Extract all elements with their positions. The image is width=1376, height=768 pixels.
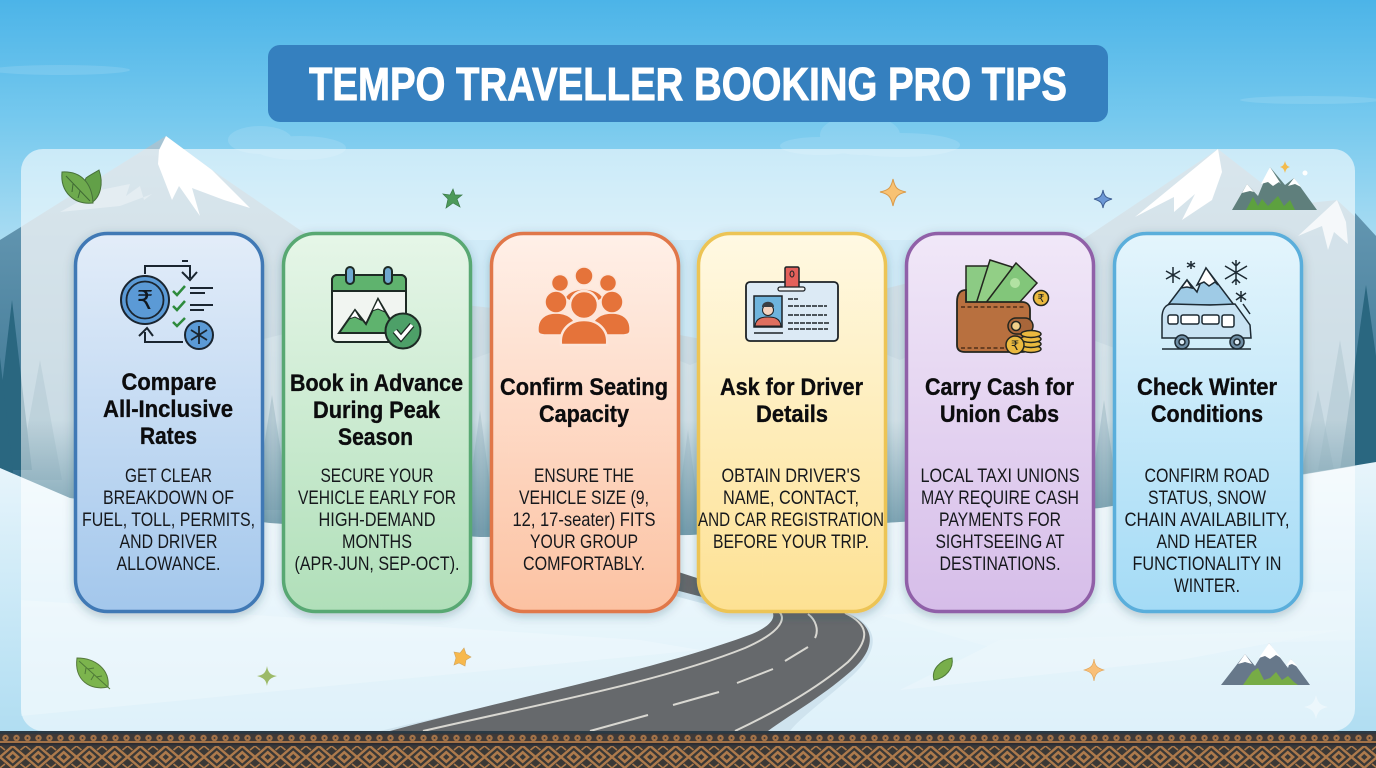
body text: CHAIN AVAILABILITY,: [1124, 510, 1290, 531]
heading: [290, 370, 463, 451]
icon: faint white sparkle: [1304, 695, 1328, 719]
icon: mini mountains top right: [1232, 161, 1317, 210]
title banner: [268, 45, 1108, 122]
body text: OBTAIN DRIVER'S: [722, 466, 860, 487]
body text: MONTHS: [342, 532, 412, 553]
icon: leaf bottom left: [77, 658, 110, 689]
icon: mini mountains bottom right: [1221, 643, 1310, 685]
body text: STATUS, SNOW: [1148, 488, 1266, 509]
body text: FUNCTIONALITY IN: [1132, 554, 1282, 575]
panel: translucent backdrop: [21, 149, 1355, 731]
background: snow ground: [0, 462, 1376, 768]
panel: compare rates: [76, 234, 262, 612]
icon: rupee coin checklist: [121, 261, 213, 349]
icon: gold star: [454, 648, 471, 666]
heading: Details: [756, 401, 828, 428]
background: pine trees: [0, 285, 1376, 535]
icon: wallet with cash: ₹: [1038, 292, 1044, 305]
heading: Ask for Driver: [720, 374, 863, 401]
body text: ALLOWANCE.: [116, 554, 220, 575]
icon: green sparkle: [257, 666, 277, 686]
heading: [500, 374, 668, 428]
heading: Carry Cash for: [925, 374, 1074, 401]
heading: [1137, 374, 1277, 428]
body text: [82, 466, 255, 575]
body text: BEFORE YOUR TRIP.: [713, 532, 869, 553]
icon: orange sparkle bottom: [1084, 659, 1104, 681]
body text: MAY REQUIRE CASH: [921, 488, 1079, 509]
body text: GET CLEAR: [125, 466, 212, 487]
body text: BREAKDOWN OF: [103, 488, 234, 509]
panel: confirm seating: [492, 234, 678, 612]
heading: Union Cabs: [940, 401, 1059, 428]
footer: woven pattern strip: [0, 731, 1376, 768]
panel: book in advance: [284, 234, 470, 612]
body text: YOUR GROUP: [530, 532, 638, 553]
background: snow drift bands: [21, 590, 1355, 716]
body text: HIGH-DEMAND: [318, 510, 436, 531]
title: TEMPO TRAVELLER BOOKING PRO TIPS: [309, 58, 1067, 110]
body text: [920, 466, 1080, 575]
icon: driver id badge: [746, 267, 838, 341]
icon: leaves top left: [62, 170, 101, 203]
heading: [103, 369, 233, 450]
background: clouds: [0, 65, 1376, 160]
background: mountains: [0, 136, 1376, 560]
heading: Conditions: [1151, 401, 1263, 428]
heading: [720, 374, 863, 428]
body text: WINTER.: [1174, 576, 1240, 597]
icon: blue sparkle: [1094, 190, 1112, 208]
heading: [925, 374, 1074, 428]
body text: COMFORTABLY.: [523, 554, 645, 575]
heading: Capacity: [539, 401, 630, 428]
body text: FUEL, TOLL, PERMITS,: [82, 510, 255, 531]
heading: During Peak: [313, 397, 441, 424]
body text: LOCAL TAXI UNIONS: [920, 466, 1080, 487]
body text: AND CAR REGISTRATION: [698, 510, 884, 531]
background: sky: [0, 0, 1376, 240]
panel: driver details: [698, 234, 886, 612]
heading: Book in Advance: [290, 370, 463, 397]
body text: SECURE YOUR: [320, 466, 434, 487]
body text: DESTINATIONS.: [940, 554, 1060, 575]
body text: ENSURE THE: [534, 466, 634, 487]
icon: van with snowy mountain: [1162, 260, 1251, 349]
body text: PAYMENTS FOR: [939, 510, 1061, 531]
body text: SIGHTSEEING AT: [936, 532, 1065, 553]
heading: Rates: [140, 423, 197, 450]
body text: 12, 17-seater) FITS: [512, 510, 656, 531]
body text: [512, 466, 656, 575]
background: horizon haze: [21, 420, 1355, 537]
icon: wallet with cash: ₹: [1011, 339, 1019, 354]
body text: CONFIRM ROAD: [1144, 466, 1270, 487]
heading: All-Inclusive: [103, 396, 233, 423]
icon: orange sparkle: [880, 179, 906, 206]
heading: Check Winter: [1137, 374, 1277, 401]
body text: [1124, 466, 1290, 597]
icon: rupee coin checklist: ₹: [137, 286, 153, 316]
panel: winter conditions: [1114, 234, 1302, 612]
body text: VEHICLE SIZE (9,: [519, 488, 649, 509]
body text: [294, 466, 460, 575]
body text: [698, 466, 884, 553]
icon: small leaf: [933, 658, 952, 680]
body text: AND HEATER: [1156, 532, 1258, 553]
panel: carry cash: [906, 234, 1094, 612]
icon: green star: [443, 189, 462, 208]
body text: (APR-JUN, SEP-OCT).: [294, 554, 460, 575]
icon: group of people: [538, 267, 630, 345]
icon: calendar with mountains: [332, 267, 420, 348]
road: [380, 566, 873, 731]
icon: wallet with cash: [957, 260, 1048, 354]
body text: NAME, CONTACT,: [723, 488, 859, 509]
heading: Confirm Seating: [500, 374, 668, 401]
body text: VEHICLE EARLY FOR: [298, 488, 456, 509]
heading: Compare: [122, 369, 216, 396]
body text: AND DRIVER: [120, 532, 218, 553]
heading: Season: [338, 424, 413, 451]
